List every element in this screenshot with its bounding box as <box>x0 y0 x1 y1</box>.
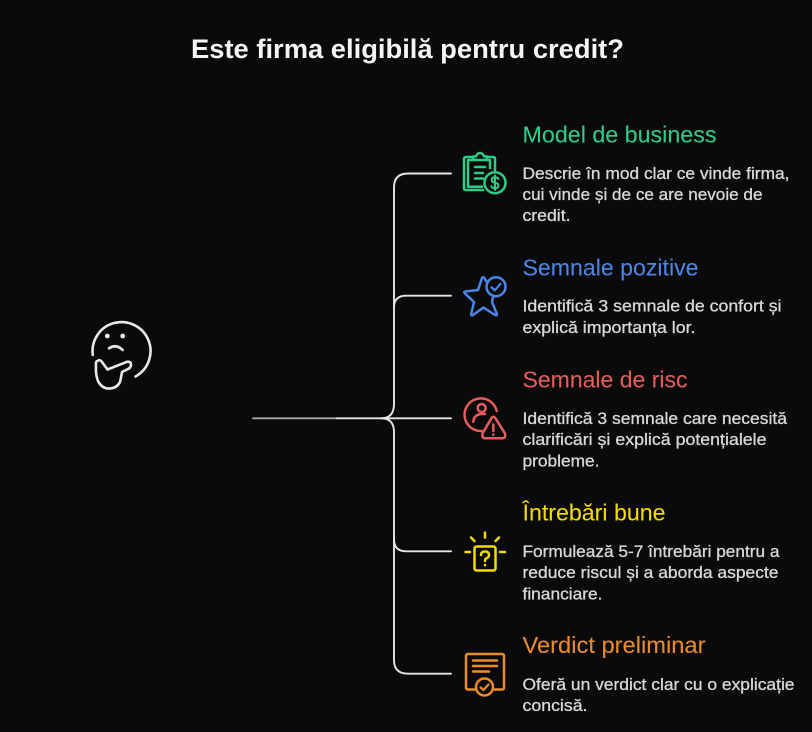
description <box>522 676 794 715</box>
description: explică importanța lor. <box>522 319 696 337</box>
description: cui vinde și de ce are nevoie de <box>522 186 762 204</box>
icon: clipboard with dollar <box>464 153 506 193</box>
item: Întrebări bune <box>466 500 780 604</box>
connector tree <box>253 174 451 674</box>
item: Semnale pozitive <box>464 255 782 337</box>
description: Descrie în mod clar ce vinde firma, <box>522 165 790 183</box>
description: probleme. <box>522 452 600 470</box>
item: Verdict preliminar <box>466 632 794 715</box>
description: financiare. <box>522 586 602 604</box>
title: Este firma eligibilă pentru credit? <box>191 34 624 64</box>
description: Identifică 3 semnale care necesită <box>522 410 788 428</box>
description: reduce riscul și a aborda aspecte <box>522 564 778 582</box>
description: concisă. <box>522 697 588 715</box>
description: Identifică 3 semnale de confort și <box>522 298 782 316</box>
description: credit. <box>522 207 570 225</box>
description: clarificări și explică potențialele <box>522 431 766 449</box>
item: Semnale de risc <box>465 367 788 470</box>
icon: thinking face <box>93 322 151 389</box>
description: Oferă un verdict clar cu o explicație <box>522 676 794 694</box>
heading: Semnale pozitive <box>522 255 698 281</box>
icon: certificate with check <box>466 654 504 696</box>
description: Formulează 5-7 întrebări pentru a <box>522 543 780 561</box>
item: Model de business <box>464 122 790 225</box>
heading: Verdict preliminar <box>522 632 706 658</box>
description <box>522 410 788 470</box>
description <box>522 298 782 337</box>
heading: Model de business <box>522 122 716 148</box>
icon: question box with rays <box>466 532 505 570</box>
icon: person with warning <box>465 398 505 438</box>
heading: Semnale de risc <box>522 367 688 393</box>
icon: star with check <box>464 277 506 315</box>
description <box>522 543 780 604</box>
description <box>522 165 790 225</box>
heading: Întrebări bune <box>522 500 666 526</box>
